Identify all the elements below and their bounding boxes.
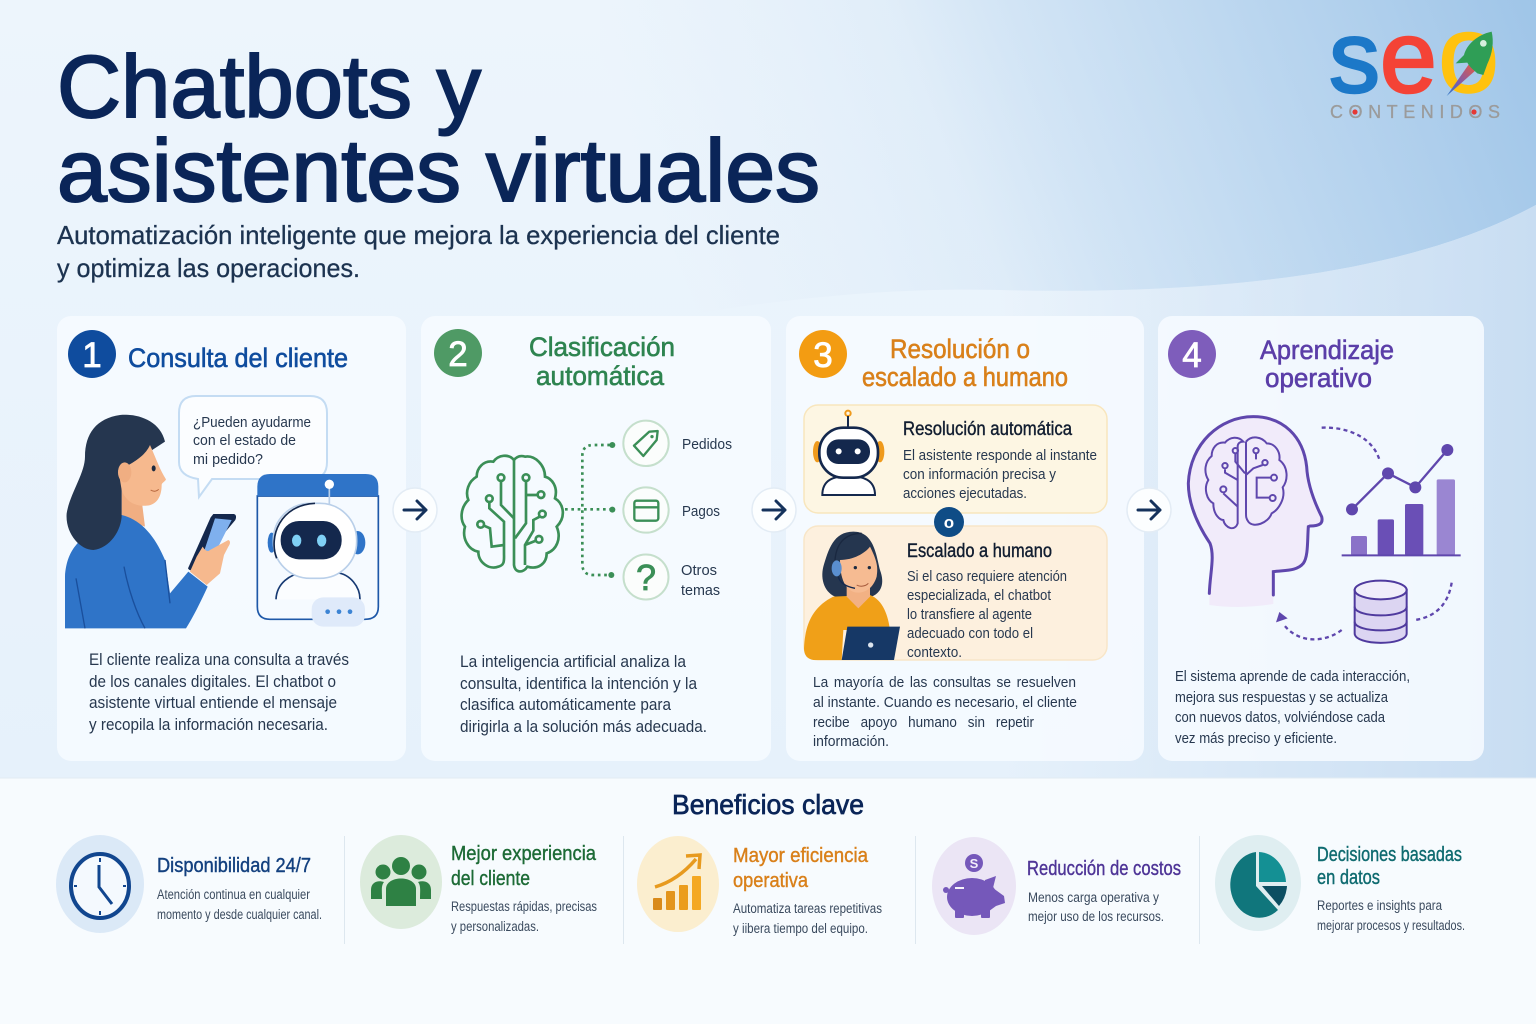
text (1317, 844, 1465, 933)
description: de los canales digitales. El chatbot o (89, 672, 336, 691)
heading: escalado a humano (862, 362, 1068, 392)
text: Respuestas rápidas, precisas (451, 899, 597, 914)
benefit: disponibilidad (56, 835, 322, 933)
title (57, 37, 820, 220)
panel: step 4 aprendizaje operativo (1158, 316, 1484, 761)
icon: piggy bank (932, 837, 1016, 935)
text: acciones ejecutadas. (903, 485, 1027, 502)
text: Disponibilidad 24/7 (157, 855, 311, 877)
text (1027, 858, 1181, 924)
label pagos: Pagos (682, 503, 720, 520)
description: al instante. Cuando es necesario, el cliente (813, 694, 1077, 711)
subtitle: Automatización inteligente que mejora la experiencia del cliente (57, 220, 780, 250)
title: Chatbots y (57, 37, 481, 136)
heading (1260, 335, 1394, 393)
speech bubble: mi pedido? (193, 451, 263, 468)
heading: operativo (1265, 363, 1372, 393)
benefit: decisiones (1215, 835, 1465, 933)
text: Decisiones basadas (1317, 844, 1462, 866)
description: con nuevos datos, volviéndose cada (1175, 709, 1386, 726)
description: dirigirla a la solución más adecuada. (460, 717, 707, 736)
text: en datos (1317, 867, 1380, 889)
text: con información precisa y (903, 466, 1056, 483)
description: y recopila la información necesaria. (89, 715, 328, 734)
step number 1 (68, 330, 116, 378)
description: asistente virtual entiende el mensaje (89, 693, 337, 712)
description: clasifica automáticamente para (460, 695, 671, 714)
description: El cliente realiza una consulta a través (89, 650, 349, 669)
icon: pagos card (623, 487, 669, 533)
connector lines (565, 442, 615, 578)
panel: step 1 consulta del cliente (57, 316, 406, 761)
text (451, 843, 597, 934)
label otros temas: Otros (681, 562, 717, 579)
description: recibe apoyo humano sin repetir (813, 714, 1034, 731)
text: Reducción de costos (1027, 858, 1181, 880)
description (813, 674, 1077, 750)
text: Atención continua en cualquier (157, 887, 310, 902)
subpanel: resolucion automatica (804, 405, 1107, 513)
text: mejor uso de los recursos. (1028, 909, 1164, 924)
text: lo transfiere al agente (907, 606, 1032, 623)
text: operativa (733, 870, 809, 892)
text: Si el caso requiere atención (907, 568, 1067, 585)
step number 3: 3 (813, 336, 833, 375)
background (0, 0, 1536, 790)
illustration: agent with headset (804, 532, 900, 660)
step number 4: 4 (1182, 336, 1202, 375)
text: Reportes e insights para (1317, 898, 1442, 913)
illustration: chatbot window (257, 474, 378, 627)
description (89, 650, 349, 734)
text: y iibera tiempo del equipo. (733, 921, 868, 936)
benefit: eficiencia (637, 836, 882, 936)
panel: step 3 resolucion o escalado (786, 316, 1144, 761)
step number 3 (799, 330, 847, 378)
illustration: head with brain (1188, 417, 1322, 607)
description: mejora sus respuestas y se actualiza (1175, 689, 1389, 706)
icon: database (1355, 581, 1407, 643)
badge: o (934, 507, 964, 537)
dashed cycle arrows (1276, 428, 1452, 639)
text: momento y desde cualquier canal. (157, 907, 322, 922)
logo: SEO Contenidos: CONTENIDOS (1330, 102, 1500, 122)
label otros temas: temas (681, 582, 720, 599)
step number 2 (434, 329, 482, 377)
description: consulta, identifica la intención y la (460, 674, 697, 693)
icon: otros question (624, 554, 668, 600)
icon: people (360, 835, 442, 929)
subtitle: y optimiza las operaciones. (57, 253, 360, 283)
title: asistentes virtuales (57, 121, 820, 220)
heading (529, 332, 675, 391)
text: Mejor experiencia (451, 843, 597, 865)
heading: automática (536, 361, 665, 391)
icon: robot (813, 411, 884, 495)
icon: brain circuit (462, 456, 563, 571)
text: Mayor eficiencia (733, 845, 869, 867)
speech bubble: con el estado de (193, 432, 296, 449)
text (903, 419, 1097, 502)
text: Resolución automática (903, 419, 1072, 440)
step number 4 (1168, 330, 1216, 378)
icon: growth chart (637, 836, 719, 932)
text: Menos carga operativa y (1028, 890, 1159, 905)
text: El asistente responde al instante (903, 447, 1097, 464)
description: La inteligencia artificial analiza la (460, 652, 686, 671)
bar and line chart (1342, 444, 1461, 555)
subpanel: escalado a humano (804, 526, 1107, 661)
description: El sistema aprende de cada interacción, (1175, 668, 1410, 685)
speech bubble (179, 396, 327, 497)
label pedidos: Pedidos (682, 436, 732, 453)
description: La mayoría de las consultas se resuelven (813, 674, 1076, 691)
label otros temas (681, 562, 720, 599)
heading: Aprendizaje (1260, 335, 1394, 365)
badge: o: o (944, 513, 954, 532)
description: información. (813, 733, 889, 750)
arrow 2 to 3 (752, 488, 796, 532)
text: Escalado a humano (907, 541, 1052, 562)
panel: beneficios clave (0, 778, 1536, 1024)
benefit: costos (932, 837, 1181, 935)
icon: otros question: ? (636, 557, 656, 598)
text: y personalizadas. (451, 919, 539, 934)
arrow 1 to 2 (393, 488, 437, 532)
arrow 3 to 4 (1127, 488, 1171, 532)
text (157, 855, 322, 922)
icon: clock (56, 835, 144, 933)
step number 1: 1 (82, 336, 102, 375)
text: del cliente (451, 868, 530, 890)
heading: Resolución o (890, 334, 1030, 364)
panel: step 2 clasificacion automatica (421, 316, 771, 761)
subtitle (57, 220, 780, 283)
heading: Consulta del cliente (128, 343, 348, 373)
description: vez más preciso y eficiente. (1175, 730, 1337, 747)
text: adecuado con todo el (907, 625, 1033, 642)
icon: piggy bank: S (970, 856, 979, 871)
heading: Beneficios clave (672, 789, 864, 820)
description (460, 652, 707, 736)
benefit: experiencia (360, 835, 597, 934)
text: especializada, el chatbot (907, 587, 1052, 604)
heading (862, 334, 1068, 392)
text: Automatiza tareas repetitivas (733, 901, 882, 916)
icon: pie chart (1215, 835, 1301, 931)
text (733, 845, 882, 936)
text (907, 541, 1067, 661)
text: contexto. (907, 644, 962, 661)
heading: Clasificación (529, 332, 675, 362)
step number 2: 2 (448, 335, 468, 374)
text: mejorar procesos y resultados. (1317, 918, 1465, 933)
description (1175, 668, 1410, 747)
speech bubble: ¿Pueden ayudarme (193, 414, 311, 431)
icon: pedidos tag (623, 421, 669, 466)
illustration: woman with phone (65, 415, 236, 628)
